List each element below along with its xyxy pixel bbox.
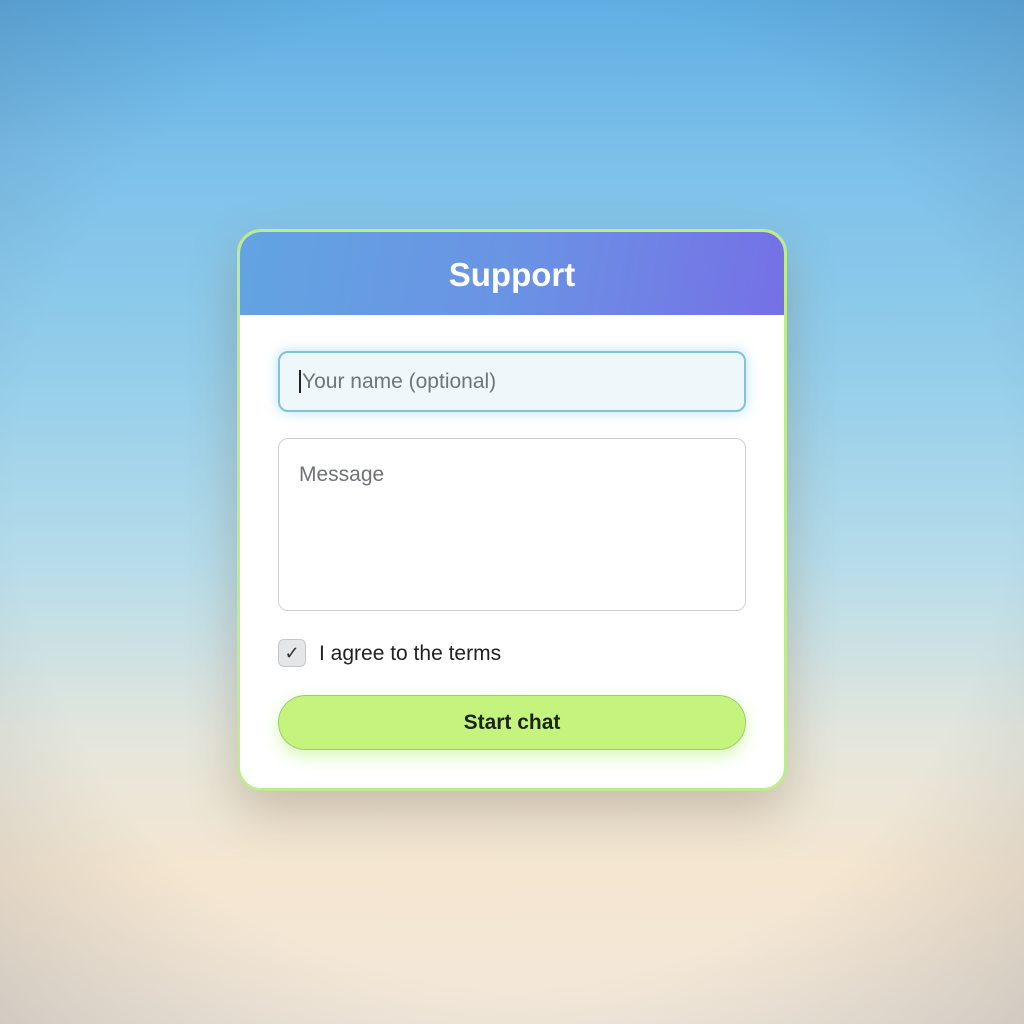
button: Start chat xyxy=(278,695,746,750)
icon: checkbox: ✓ xyxy=(284,643,300,663)
button: Start chat: Start chat xyxy=(464,711,560,734)
panel: support form card xyxy=(237,229,787,791)
checkbox: agree terms xyxy=(278,639,501,667)
textarea: message: Message xyxy=(299,463,384,486)
heading: Support xyxy=(240,232,784,315)
textarea: message xyxy=(278,438,746,611)
text: I agree to the terms: I agree to the terms xyxy=(319,642,501,665)
input: name: Your name (optional) xyxy=(302,370,496,393)
heading: Support: Support xyxy=(449,256,575,293)
icon: checkbox xyxy=(278,639,306,667)
input: name xyxy=(278,351,746,412)
